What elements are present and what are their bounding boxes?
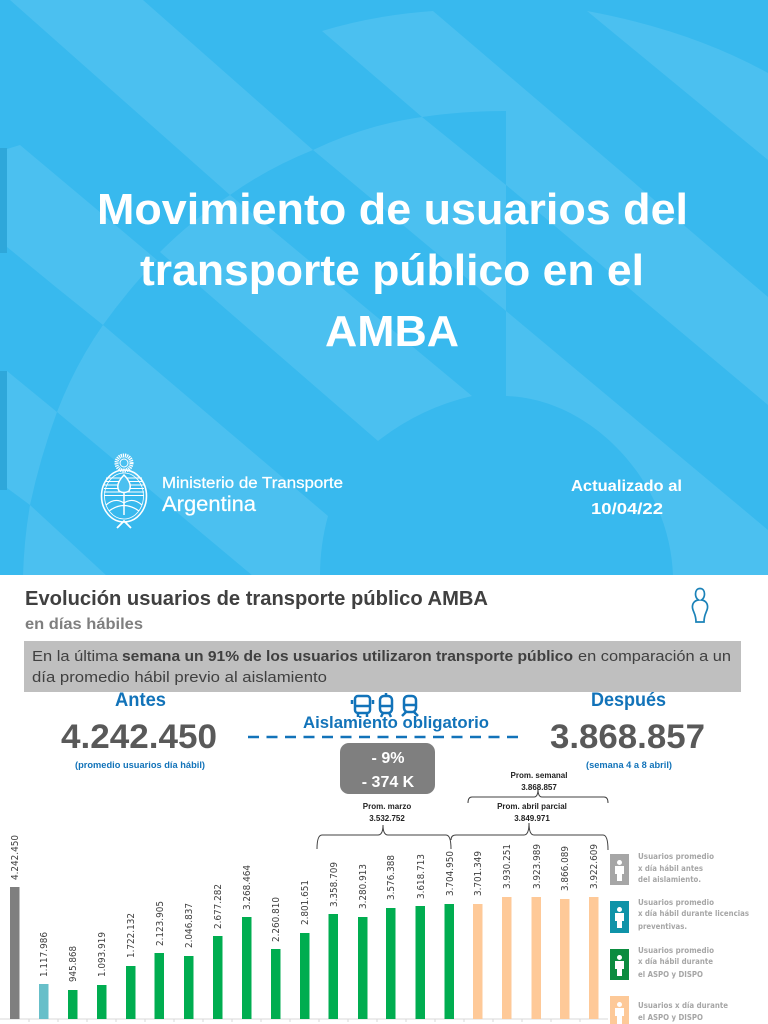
title: transporte público en el: [140, 246, 644, 295]
legend: preventive leave: preventivas.: [638, 922, 687, 931]
bracket: march average: Prom. marzo: [363, 802, 411, 811]
bar chart: 945.868: [68, 946, 79, 982]
icon: bus: [352, 696, 373, 717]
bar chart: [0, 835, 608, 1022]
bar chart: 3.704.950: [445, 851, 456, 896]
bar chart: 2.046.837: [184, 903, 195, 948]
before figure: [61, 690, 217, 770]
bar chart: 3.866.089: [560, 846, 571, 891]
bar chart: 2.123.905: [155, 901, 166, 946]
legend: before isolation: Usuarios promedio: [638, 852, 714, 861]
summary box: día promedio hábil previo al aislamiento: [32, 669, 327, 686]
logo text: Ministerio de Transporte: [162, 475, 343, 492]
bar chart: 3.923.989: [532, 844, 543, 889]
bar chart: 3.922.609: [589, 844, 600, 889]
logo text: [162, 475, 343, 516]
bar chart: 3.618.713: [416, 854, 427, 899]
bar chart: 3.930.251: [502, 844, 513, 889]
callout: [340, 743, 435, 794]
legend: ASPO and DISPO weekday: el ASPO y DISPO: [638, 970, 703, 979]
bracket: partial April average: 3.849.971: [514, 814, 550, 823]
bar chart: 3.280.913: [358, 864, 369, 909]
before figure: Antes: [115, 690, 166, 711]
before figure: (promedio usuarios día hábil): [75, 760, 205, 770]
legend: preventive leave: Usuarios promedio: [638, 898, 714, 907]
legend: ASPO and DISPO daily: [610, 996, 729, 1024]
legend: before isolation: x día hábil antes: [638, 864, 703, 873]
bar chart: 3.576.388: [386, 855, 397, 900]
bracket: weekly average: [468, 771, 608, 803]
legend: ASPO and DISPO weekday: Usuarios promedio: [638, 946, 714, 955]
bracket: march average: 3.532.752: [369, 814, 405, 823]
summary box: En la última: [32, 648, 119, 665]
bar chart: 2.260.810: [271, 897, 282, 942]
before figure: 4.242.450: [61, 718, 217, 756]
bracket: partial April average: [451, 802, 608, 850]
panel: evolution: [0, 575, 768, 1024]
callout: - 374 K: [362, 774, 415, 791]
icon: tram: [402, 696, 418, 716]
legend: ASPO and DISPO daily: Usuarios x día durante: [638, 1001, 729, 1010]
bar chart: 1.093.919: [97, 932, 108, 977]
bar chart: 4.242.450: [10, 835, 21, 880]
bar chart: 2.677.282: [213, 884, 224, 929]
update date: Actualizado al: [571, 478, 682, 495]
panel: cover: [0, 0, 768, 576]
after figure: (semana 4 a 8 abril): [586, 760, 672, 770]
after figure: [550, 690, 705, 770]
legend: before isolation: del aislamiento.: [638, 875, 701, 884]
update date: 10/04/22: [591, 501, 663, 518]
bar chart: 2.801.651: [300, 880, 311, 925]
icon: train: [380, 693, 392, 717]
title: AMBA: [325, 307, 459, 356]
icon: person outline: [692, 588, 708, 622]
isolation label: Aislamiento obligatorio: [303, 713, 489, 732]
bar chart: 1.117.986: [39, 932, 50, 977]
heading: Evolución usuarios de transporte público AMBA: [25, 588, 488, 610]
subheading: en días hábiles: [25, 616, 143, 633]
logo text: Argentina: [162, 493, 256, 516]
summary box: semana un 91% de los usuarios utilizaron transporte público: [122, 648, 573, 665]
icon: coat of arms: [102, 456, 146, 528]
update date: [571, 478, 682, 518]
bracket: partial April average: Prom. abril parcial: [497, 802, 567, 811]
bar chart: 1.722.132: [126, 913, 137, 958]
legend: preventive leave: x día hábil durante licencias: [638, 909, 749, 918]
legend: ASPO and DISPO weekday: [610, 946, 714, 980]
callout: - 9%: [372, 750, 404, 767]
legend: before isolation: [610, 852, 714, 885]
summary box: [24, 641, 741, 692]
bracket: weekly average: Prom. semanal: [511, 771, 567, 780]
bar chart: 3.358.709: [329, 862, 340, 907]
after figure: 3.868.857: [550, 718, 705, 756]
title: [97, 185, 688, 356]
summary box: en comparación a un: [578, 648, 731, 665]
dashed arrow line: [248, 736, 520, 738]
bracket: weekly average: 3.868.857: [521, 783, 557, 792]
legend: ASPO and DISPO daily: el ASPO y DISPO: [638, 1013, 703, 1022]
after figure: Después: [591, 690, 666, 711]
bracket: march average: [317, 802, 451, 849]
legend: ASPO and DISPO weekday: x día hábil durante: [638, 957, 713, 966]
bar chart: 3.268.464: [242, 865, 253, 910]
legend: preventive leave: [610, 898, 749, 933]
title: Movimiento de usuarios del: [97, 185, 688, 234]
bar chart: 3.701.349: [473, 851, 484, 896]
